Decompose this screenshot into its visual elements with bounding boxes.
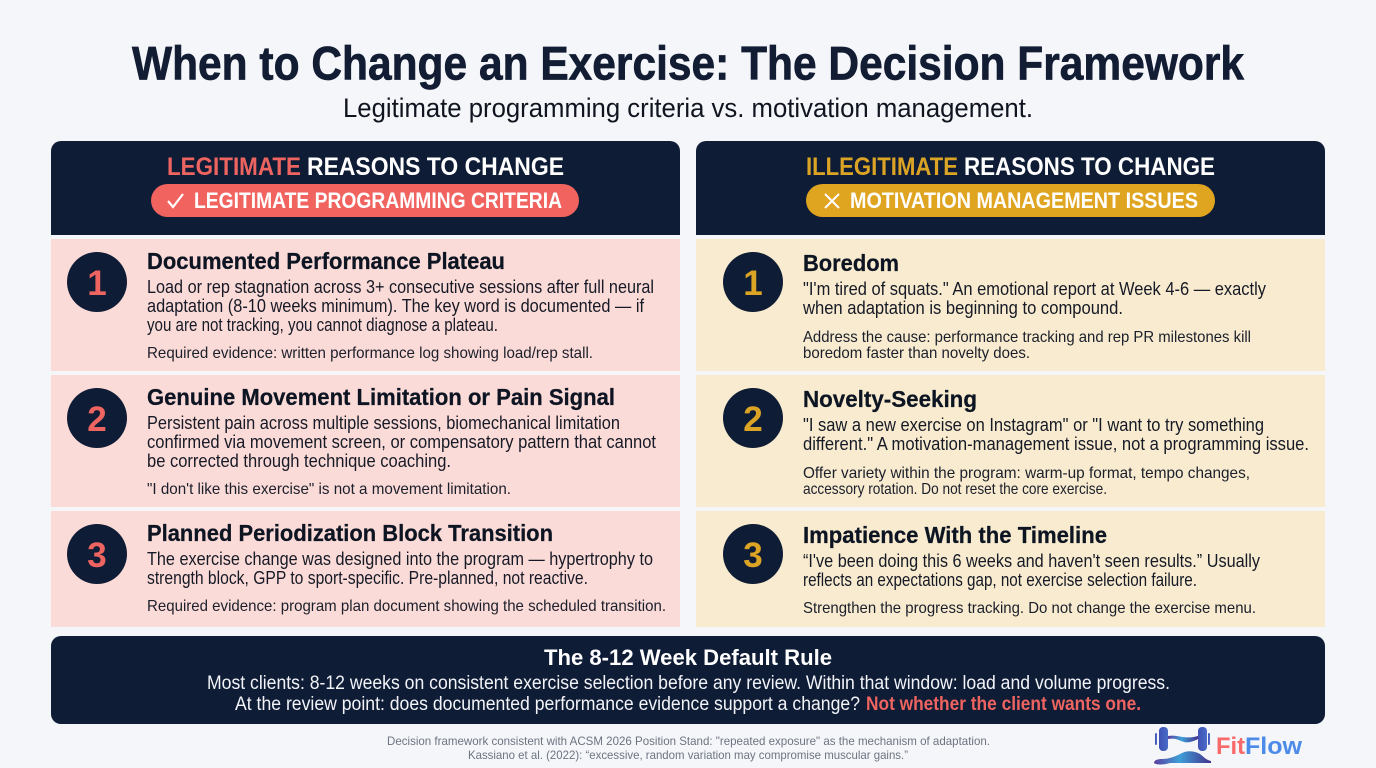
card: documented performance plateau: 1	[87, 264, 107, 303]
icon: dumbbell with wave	[1154, 727, 1211, 764]
legitimate header	[51, 141, 680, 235]
card: boredom	[696, 239, 1325, 371]
footer citations	[387, 734, 990, 762]
card: genuine movement limitation: "I don't like this exercise" is not a movement limitation.	[147, 481, 511, 498]
logo: FitFlow: Fit	[1216, 733, 1245, 760]
callout: 8-12 week default rule	[51, 636, 1325, 724]
card: documented performance plateau: Load or rep stagnation across 3+ consecutive sessions after full neural	[147, 277, 654, 297]
card: impatience: reflects an expectations gap, not exercise selection failure.	[803, 570, 1197, 590]
footer citations: Decision framework consistent with ACSM 2026 Position Stand: "repeated exposure" as the mechanism of adaptation.	[387, 734, 990, 748]
illegitimate header: MOTIVATION MANAGEMENT ISSUES	[850, 188, 1198, 213]
logo: FitFlow: Flow	[1245, 733, 1302, 760]
card: documented performance plateau: Required evidence: written performance log showing load/rep stall.	[147, 345, 593, 362]
card: novelty-seeking: Offer variety within the program: warm-up format, tempo changes,	[803, 465, 1250, 482]
panel: illegitimate reasons	[696, 141, 1325, 627]
card: genuine movement limitation: Genuine Movement Limitation or Pain Signal	[147, 384, 615, 410]
legitimate header: LEGITIMATE	[167, 153, 301, 181]
card: boredom: Address the cause: performance tracking and rep PR milestones kill	[803, 329, 1251, 346]
card: novelty-seeking	[696, 375, 1325, 507]
card: boredom: 1	[743, 264, 763, 303]
subtitle: Legitimate programming criteria vs. motivation management.	[343, 93, 1033, 123]
callout: 8-12 week default rule: At the review point: does documented performance evidence support a change?	[235, 694, 860, 715]
card: documented performance plateau: adaptation (8-10 weeks minimum). The key word is documented — if	[147, 296, 645, 316]
card: impatience: 3	[743, 536, 763, 575]
callout: 8-12 week default rule: The 8-12 Week Default Rule	[544, 645, 832, 670]
card: boredom: "I'm tired of squats." An emotional report at Week 4-6 — exactly	[803, 279, 1266, 299]
card: novelty-seeking: 2	[743, 400, 763, 439]
card: impatience	[696, 511, 1325, 627]
card: genuine movement limitation: confirmed via movement screen, or compensatory pattern that cannot	[147, 432, 656, 452]
card: impatience: Impatience With the Timeline	[803, 522, 1107, 548]
footer citations: Kassiano et al. (2022): “excessive, random variation may compromise muscular gains.”	[468, 748, 908, 762]
panel: legitimate reasons	[51, 141, 680, 627]
title: When to Change an Exercise: The Decision Framework	[132, 36, 1245, 90]
card: planned periodization: strength block, GPP to sport-specific. Pre-planned, not reactive.	[147, 568, 588, 588]
card: genuine movement limitation: Persistent pain across multiple sessions, biomechanical limitation	[147, 413, 620, 433]
logo: FitFlow	[1154, 727, 1302, 764]
card: boredom: boredom faster than novelty does.	[803, 345, 1030, 362]
card: impatience: Strengthen the progress tracking. Do not change the exercise menu.	[803, 600, 1256, 617]
illegitimate header	[696, 141, 1325, 235]
card: boredom: Boredom	[803, 250, 899, 276]
card: impatience: “I've been doing this 6 weeks and haven't seen results.” Usually	[803, 551, 1260, 571]
card: planned periodization: The exercise change was designed into the program — hypertrophy to	[147, 549, 653, 569]
card: novelty-seeking: accessory rotation. Do not reset the core exercise.	[803, 481, 1107, 498]
card: novelty-seeking: "I saw a new exercise on Instagram" or "I want to try something	[803, 415, 1264, 435]
illegitimate header: ILLEGITIMATE	[806, 153, 958, 181]
card: genuine movement limitation: 2	[87, 400, 107, 439]
card: genuine movement limitation	[51, 375, 680, 507]
legitimate header: REASONS TO CHANGE	[307, 153, 564, 181]
card: boredom: when adaptation is beginning to compound.	[802, 298, 1123, 318]
legitimate header: LEGITIMATE PROGRAMMING CRITERIA	[194, 188, 562, 213]
card: planned periodization	[51, 511, 680, 627]
illegitimate header: REASONS TO CHANGE	[964, 153, 1215, 181]
card: planned periodization: Required evidence: program plan document showing the scheduled transition.	[147, 598, 666, 615]
card: documented performance plateau: you are not tracking, you cannot diagnose a plateau.	[147, 315, 498, 335]
card: genuine movement limitation: be corrected through technique coaching.	[147, 451, 451, 471]
card: novelty-seeking: different." A motivation-management issue, not a programming issue.	[803, 434, 1309, 454]
callout: 8-12 week default rule: Not whether the client wants one.	[866, 694, 1141, 715]
card: planned periodization: Planned Periodization Block Transition	[147, 520, 553, 546]
callout: 8-12 week default rule: Most clients: 8-12 weeks on consistent exercise selection before any review. Within that window: load and volume progress.	[207, 673, 1170, 694]
card: planned periodization: 3	[87, 536, 107, 575]
card: novelty-seeking: Novelty-Seeking	[803, 386, 977, 412]
card: documented performance plateau	[51, 239, 680, 371]
card: documented performance plateau: Documented Performance Plateau	[147, 248, 505, 274]
